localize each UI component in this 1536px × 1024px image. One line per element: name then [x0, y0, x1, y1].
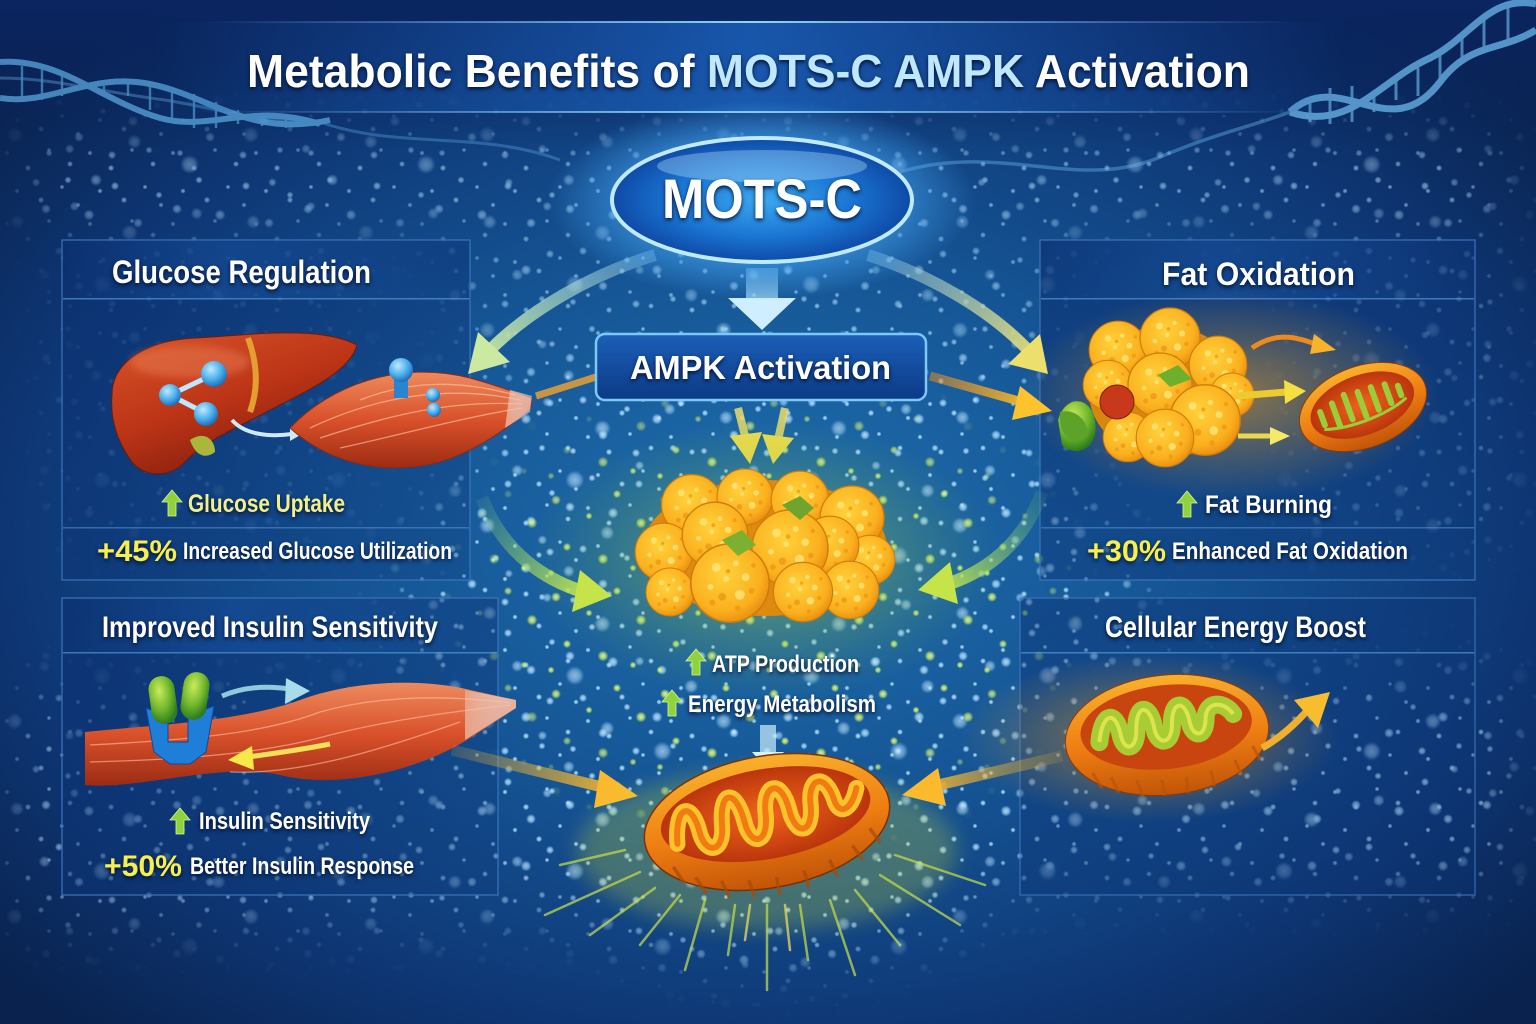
arrow: insulin to mitochondrion — [452, 750, 638, 808]
arrow: glucose entry — [228, 744, 330, 770]
arrow: metabolism to mitochondrion — [752, 725, 784, 770]
arrow: MOTS-C to glucose — [468, 255, 655, 374]
icon: insulin receptor — [146, 670, 214, 764]
stat: +30% — [1087, 535, 1408, 568]
AMPK activation node — [596, 334, 926, 400]
glow: MOTS-C — [547, 100, 977, 300]
arrows: fat to mitochondrion — [1238, 334, 1336, 445]
icon: muscle fibre — [85, 683, 516, 786]
panel: cellular energy boost — [960, 598, 1475, 895]
stat: +50% — [104, 850, 414, 883]
heading: Fat Oxidation — [1162, 256, 1355, 292]
glow behind central fat cells — [525, 420, 1005, 700]
icon: receptor molecules — [389, 358, 441, 417]
stat: ATP production: ATP Production — [712, 651, 859, 678]
stat: glucose uptake: Glucose Uptake — [188, 490, 345, 518]
stat: +45% — [97, 535, 452, 568]
stat: energy metabolism: Energy Metabolism — [688, 691, 876, 718]
stat: +45%: +45% — [97, 535, 177, 568]
icon: small mitochondrion — [1287, 346, 1439, 468]
arrow: AMPK to glucose — [536, 377, 596, 396]
MOTS-C node — [612, 138, 912, 262]
title: Metabolic Benefits of MOTS-C AMPK Activation — [247, 45, 1250, 97]
icon: mitochondrion — [1059, 665, 1275, 805]
icon: central mitochondrion — [633, 735, 902, 916]
stat: +30%: Enhanced Fat Oxidation — [1172, 538, 1408, 565]
arrow: MOTS-C to AMPK — [728, 268, 796, 330]
stat: insulin sensitivity: Insulin Sensitivity — [199, 808, 371, 835]
arrow: energy output — [1262, 692, 1330, 748]
arrow: MOTS-C to fat — [868, 255, 1048, 374]
stat: +50%: +50% — [104, 850, 182, 883]
icon: central fat cluster — [635, 469, 895, 622]
stat: +50%: Better Insulin Response — [190, 853, 414, 880]
MOTS-C node: MOTS-C — [662, 167, 862, 230]
heading: Improved Insulin Sensitivity — [102, 611, 438, 644]
glow: central mitochondrion — [577, 770, 957, 930]
arrows: AMPK to fat cells — [730, 408, 794, 464]
panel: glucose regulation — [62, 240, 532, 580]
icon: molecule — [159, 361, 227, 426]
panel: fat oxidation — [1020, 240, 1475, 580]
arrow: liver to muscle — [232, 420, 302, 441]
stat: +45%: Increased Glucose Utilization — [183, 538, 452, 565]
arrow: left fat path — [482, 498, 612, 612]
icon: liver — [112, 333, 357, 474]
icon: fat cluster — [1058, 308, 1254, 467]
panel: improved insulin sensitivity — [62, 598, 516, 895]
DNA helix left — [0, 62, 560, 160]
stat: +30%: +30% — [1087, 535, 1166, 568]
green particle field — [440, 396, 1080, 840]
arrow: energy to mitochondrion — [902, 756, 1062, 806]
stat: fat burning: Fat Burning — [1205, 491, 1332, 519]
energy rays — [545, 850, 985, 990]
arrow: AMPK to fat — [930, 376, 1052, 420]
AMPK activation node: AMPK Activation — [630, 349, 891, 386]
title banner — [150, 21, 1350, 113]
icon: muscle — [290, 358, 532, 468]
stat: ATP production — [686, 649, 859, 678]
arrow: right fat path — [918, 492, 1042, 604]
arrow: insulin signal — [222, 678, 310, 704]
DNA helix right — [900, 3, 1536, 172]
heading: Glucose Regulation — [112, 254, 371, 290]
heading: Cellular Energy Boost — [1105, 611, 1366, 644]
